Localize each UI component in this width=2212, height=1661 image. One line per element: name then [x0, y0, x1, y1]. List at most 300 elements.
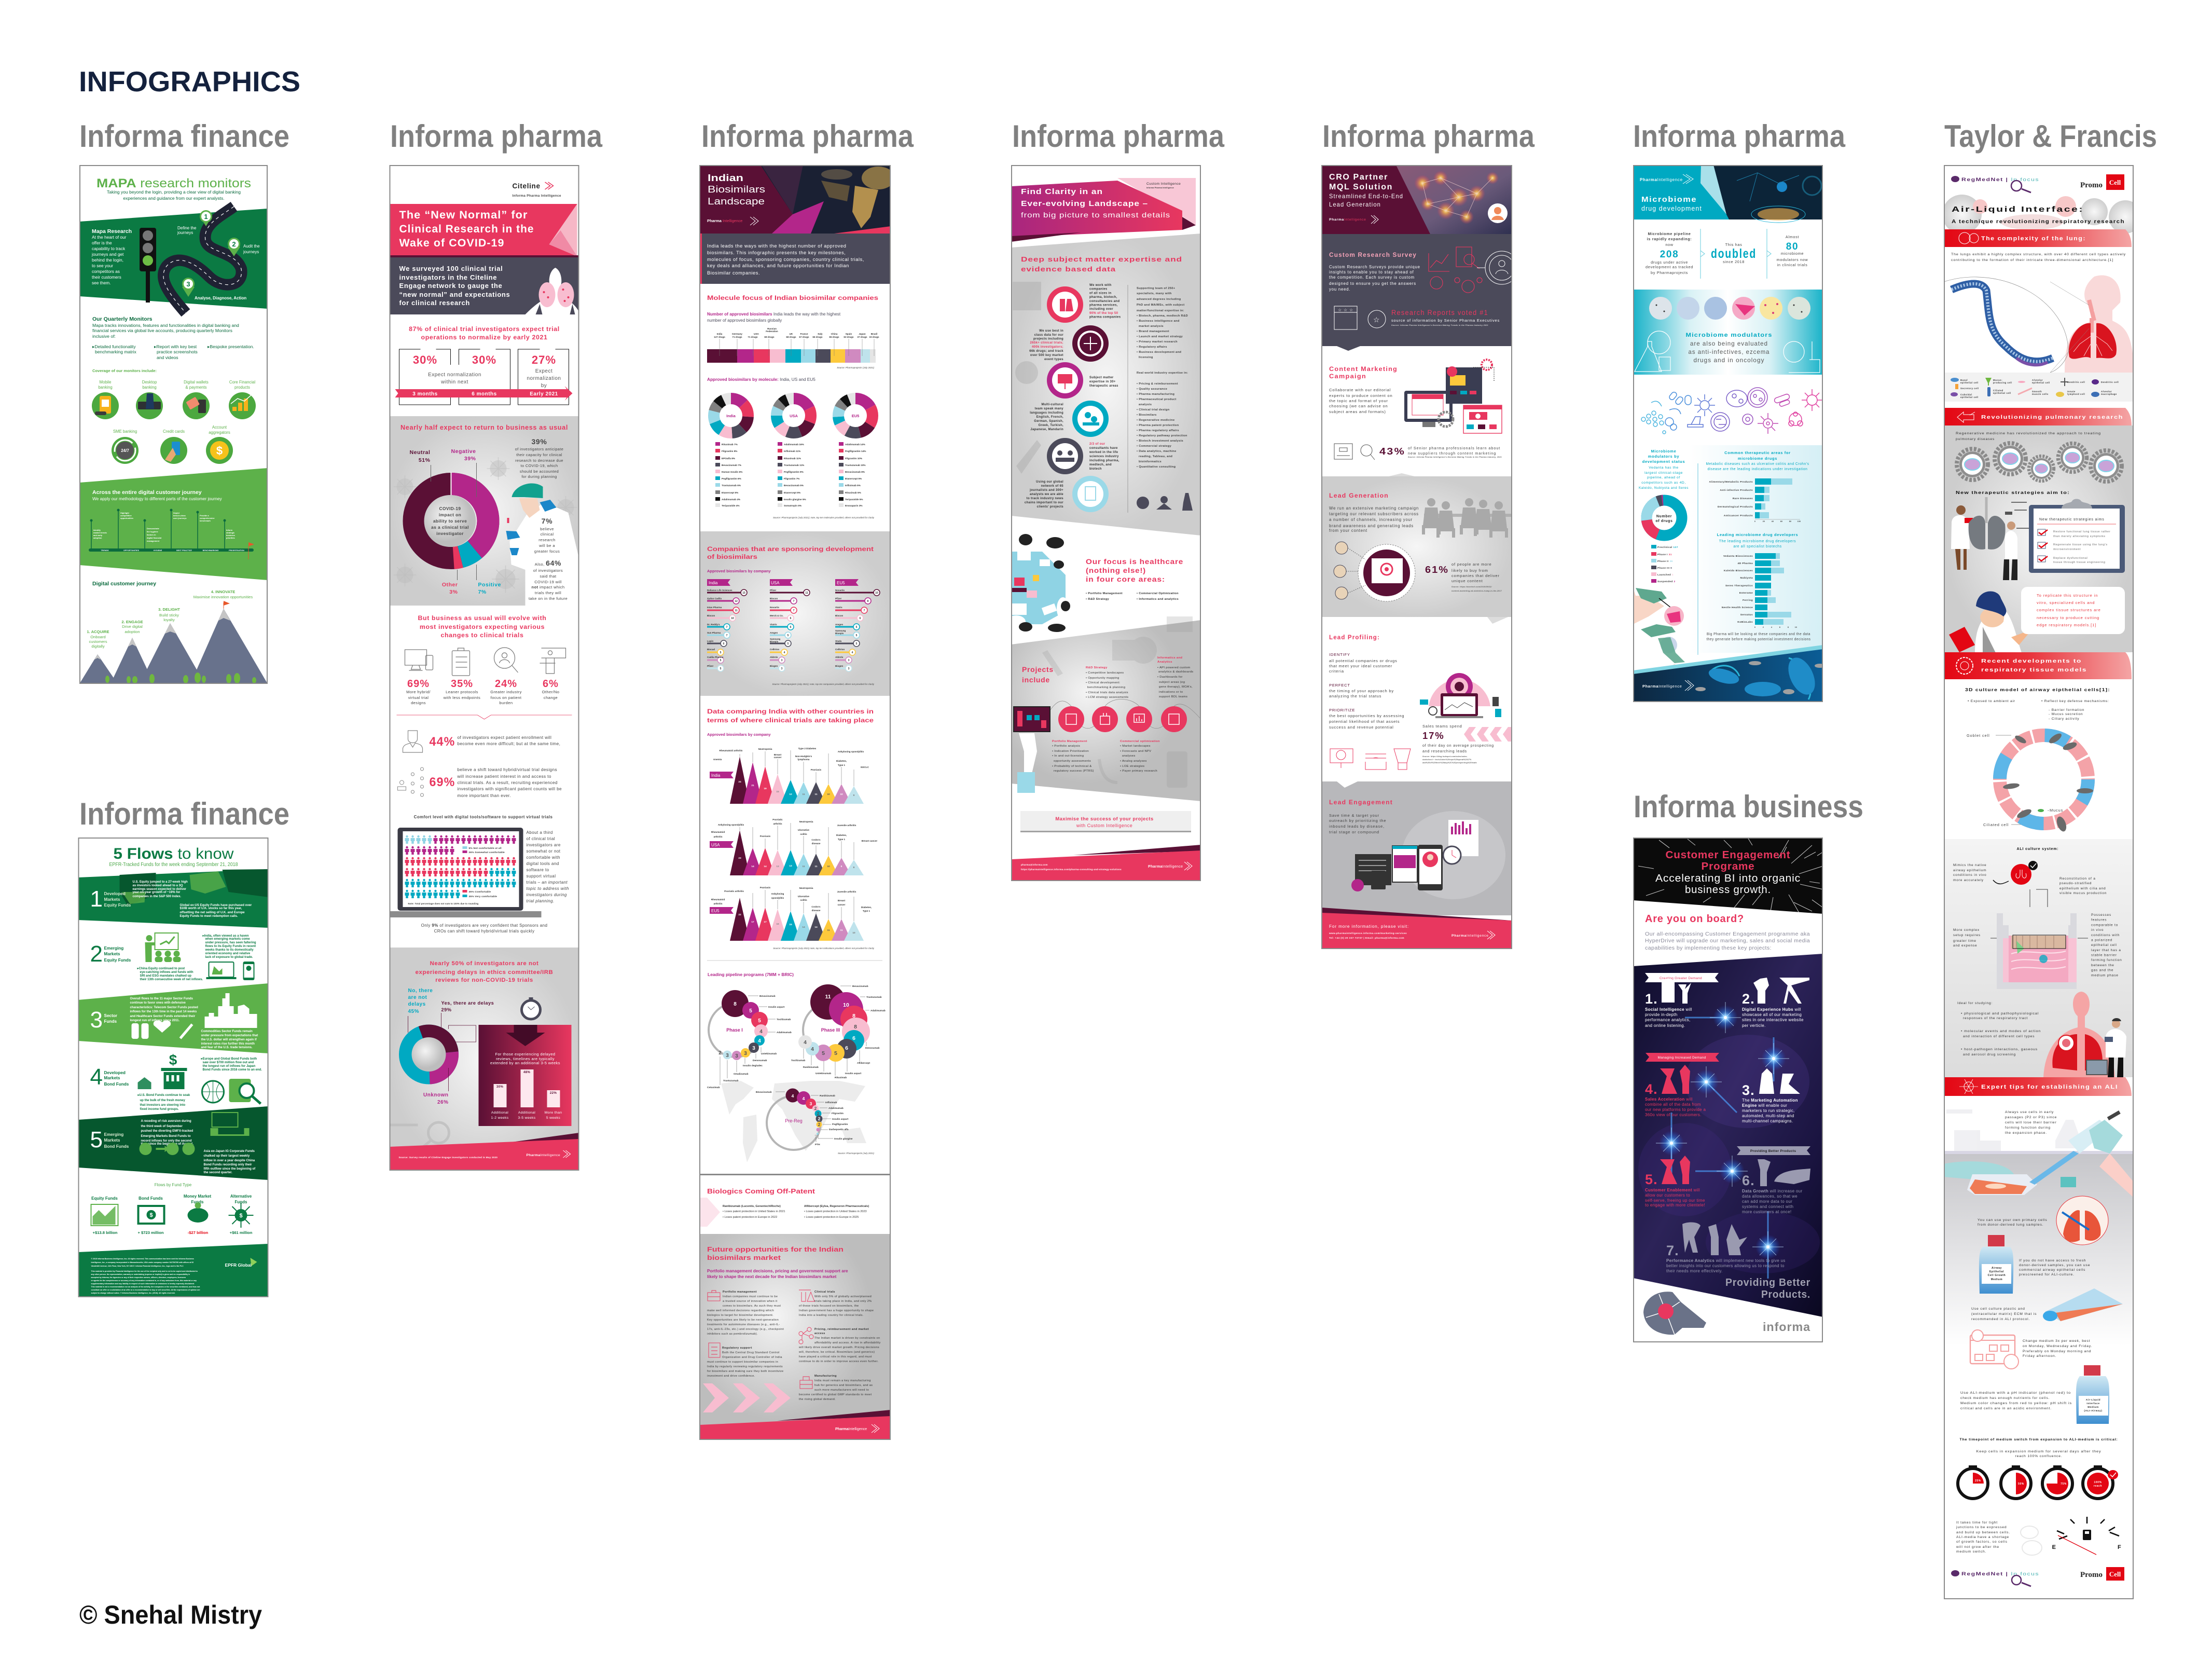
company bars: India: 5	[720, 659, 722, 662]
therapeutic areas chart: Alimentary/Metabolic Products	[1709, 481, 1753, 484]
deep subject matter section	[1011, 234, 1201, 536]
focus heading: Our focus is healthcare	[1086, 558, 1183, 566]
band 1 developed equity: U.S. Equity jumped to a 27-week high	[133, 881, 188, 884]
43 percent stat: of Senior pharma professionals learn about	[1408, 446, 1500, 450]
Mapa Research text: At the heart of our	[92, 235, 127, 240]
company bars: India: Cadila Pharma	[707, 656, 724, 658]
lead profiling section: PERFECT	[1329, 683, 1350, 688]
pipeline stat 208: is rapidly expanding:	[1647, 237, 1692, 241]
triangle chart: USA: 10	[827, 865, 830, 868]
ribbon: expert tips	[1943, 1077, 2132, 1096]
coverage icons	[92, 380, 256, 464]
country bar chart: 69 drugs	[764, 336, 775, 338]
content marketing section	[1329, 360, 1502, 433]
therapeutic areas heading: Common therapeutic areas for	[1724, 450, 1791, 455]
band 5 emerging bond: Asia ex-Japan IG Corporate Funds	[203, 1150, 255, 1153]
drug developers chart: 2	[1763, 626, 1764, 628]
projects section: • Competitive landscapes	[1086, 671, 1124, 675]
company bars: India: 10	[731, 617, 734, 620]
lead engagement section: inbound leads by disease,	[1329, 824, 1385, 829]
India intro band	[699, 234, 891, 284]
bubbles: Phase I: Denosumab	[753, 1059, 767, 1062]
tip: commercial cells: donor-derived samples, you can use	[2019, 1264, 2090, 1267]
bubbles: Phase I: 4	[758, 1038, 761, 1044]
flows by fund type heading: Flows by Fund Type	[155, 1183, 192, 1187]
molecule legends: Filgrastim 10%	[845, 457, 863, 460]
bubbles: Phase III: 4	[811, 1046, 814, 1052]
ethics delays section: 48%	[523, 1070, 530, 1074]
therapeutic areas chart: Anti-infective Products	[1720, 489, 1753, 492]
triangle chart: EU5: 17	[751, 921, 754, 924]
company bars: USA: 3	[781, 659, 783, 662]
fund type stats: -$27 billion	[188, 1230, 209, 1235]
expertise list text: advanced degrees including	[1137, 298, 1181, 301]
projects section: Portfolio Management	[1052, 740, 1087, 743]
projects section: Informatics and	[1157, 656, 1182, 660]
3D culture bullets: • Reflect key defense mechanisms:	[2041, 699, 2109, 703]
future opportunities section: India by regularly reviewing regulatory requirements	[707, 1365, 783, 1368]
lead profiling section: statistics#:~:text=Sales%20reps%20spend%2017%	[1422, 759, 1472, 761]
ethics delays section: No, there	[408, 988, 433, 994]
bubbles: Pre-Reg with world map: Pre-Reg	[785, 1118, 803, 1123]
triangle chart: India	[710, 747, 869, 804]
cell legend band: Mucus-	[1993, 379, 2002, 381]
footer disclaimer	[78, 1244, 269, 1297]
four changes icons and stats	[396, 648, 572, 719]
focus areas: • Informatics and analytics	[1137, 598, 1179, 601]
four changes icons and stats: 24%	[495, 678, 517, 690]
company bars: India: Biocon	[707, 614, 715, 617]
return to business section: COVID-19	[439, 506, 461, 511]
almost 80 stat: modulators now	[1777, 257, 1808, 262]
company bars: India: 7	[726, 634, 728, 637]
therapeutic areas chart	[1709, 478, 1801, 523]
cell legend band: Smooth	[2032, 390, 2042, 393]
bubbles: Pre-Reg with world map: 2	[814, 1106, 817, 1111]
expertise list text: analysis	[1139, 403, 1152, 406]
tip: phenol red	[1960, 1391, 2072, 1410]
return to business section: 7%	[542, 517, 552, 525]
3D culture bullets	[1968, 699, 2109, 721]
fund type stats: Bond Funds	[139, 1196, 163, 1201]
triangle chart: India: lymphoma	[798, 758, 810, 761]
survey intro band: “new normal” and expectations	[399, 291, 510, 298]
ethics delays section: 26%	[437, 1100, 448, 1105]
triangle chart: India: Type 2 Diabetes	[798, 747, 817, 750]
footer disclaimer: or agents for the completeness or accuracy of any information contained in, or of any omissions from, this material or any	[91, 1280, 197, 1282]
focus areas: • R&D Strategy	[1086, 598, 1110, 601]
footer disclaimer: This material is not a recommendation nor an analysis of the activity, the companies or the securities mentioned, and thus not	[91, 1286, 200, 1288]
four changes icons and stats: virtual trial	[408, 695, 428, 700]
company bars: USA: 6	[790, 626, 792, 629]
donut: India: India	[726, 414, 736, 418]
company bars: India: 5	[720, 651, 722, 654]
CRO footer	[1321, 908, 1512, 949]
triangle chart: USA: Psoriatic	[772, 818, 783, 821]
mountain chart: customers	[89, 639, 107, 644]
molecule legends: Adalimumab 14%	[845, 443, 866, 446]
ethics delays section: are not	[408, 995, 427, 1000]
clipboard: than merely alleviating symptoms	[2053, 535, 2105, 538]
step 3: Engine will enable our	[1742, 1103, 1787, 1108]
return to business section: will be a	[538, 543, 555, 548]
tight junction note: medium switch.	[1956, 1550, 1986, 1554]
panel: Indian Biosimilars Landscape	[699, 165, 891, 1440]
ALI culture section: greater time	[1953, 939, 1976, 943]
country bar chart: 37 drugs	[857, 336, 867, 338]
triangle chart: EU5: Neutropenia	[799, 887, 813, 889]
country bar chart: Italy	[818, 333, 823, 335]
return to business section: 7%	[478, 589, 487, 595]
big pharma note	[1707, 632, 1810, 641]
fund type stats: Money Market	[184, 1194, 212, 1199]
ethics delays section	[389, 948, 579, 1171]
drug developers chart: Kaleido Biosciences	[1724, 569, 1753, 572]
expertise chain text: We use best in	[1039, 329, 1063, 333]
Microbiome header: PharmaIntelligence	[1640, 177, 1683, 182]
44 percent row: become even more difficult; but at the same time,	[458, 742, 560, 746]
country bar chart	[707, 327, 879, 369]
cell legend band: Cuboidal	[1960, 393, 1972, 396]
informa wordmark: informa	[1763, 1320, 1810, 1334]
band 1 developed equity: year-on-year growth of ~19% for	[133, 891, 181, 894]
regenerative section: pulmonary diseases	[1956, 437, 1995, 441]
timers: 25%	[1975, 1479, 1981, 1482]
band 2 emerging equity: eye-catching inflows and funds with	[140, 971, 193, 974]
off-patent section: • Loses patent protection in Europe in 2025	[804, 1216, 859, 1219]
mountain chart: Maximise innovation opportunities	[193, 595, 253, 599]
lead profiling section: IDENTIFY	[1329, 652, 1350, 657]
return to business section: their capacity for clinical	[516, 452, 562, 457]
pipeline stat 208	[1646, 231, 1693, 275]
ribbon: better products	[1737, 1146, 1810, 1155]
green journey band: Highlight	[120, 512, 130, 514]
triangle chart: India: Diabetes,	[836, 760, 847, 762]
bubbles: Pre-Reg with world map: Infliximab	[825, 1101, 837, 1104]
comfort level side text: somewhat or not	[526, 849, 561, 854]
expertise chain text: 265k+ clinical trials;	[1030, 341, 1063, 345]
tip: phenol red: Use ALI-medium with a pH indicator (phenol red) to	[1960, 1391, 2071, 1395]
molecule legends: Etanercept 5%	[722, 491, 739, 494]
India intro band: key deals and alliances, and future opportunities for Indian	[707, 263, 849, 268]
company bars: EU5: 5	[856, 642, 858, 646]
cell legend band: Dendritic cell	[2067, 381, 2085, 383]
ALI culture section: • host-pathogen interactions, gaseous	[1961, 1048, 2038, 1051]
triangle chart: EU5: arthritis	[713, 902, 723, 905]
Citeline logo	[513, 182, 561, 198]
development status: Launched 1	[1657, 573, 1674, 576]
return to business section: Nearly half expect to return to business as usual	[400, 423, 568, 431]
tight junction note: and build up between cells.	[1956, 1531, 2010, 1534]
pipeline stat 208: now	[1665, 242, 1674, 247]
cell legend band: Alveolar	[2032, 379, 2043, 381]
Flows title: 5 Flows to know	[113, 845, 234, 862]
projects section: • In and out-licensing	[1052, 754, 1084, 758]
green journey band: HYGIENE	[154, 550, 162, 552]
green journey band: OPPORTUNITIES	[123, 550, 140, 552]
country bar chart: France	[800, 333, 808, 335]
drug developers chart: 4D Pharma	[1737, 562, 1753, 565]
return to business section: of investigators	[533, 568, 563, 573]
molecule legends: Rituximab 11%	[784, 457, 801, 460]
development status: Phase I 31	[1657, 553, 1672, 556]
India intro band: biosimilars. This infographic presents the key milestones,	[707, 250, 846, 255]
Mapa Research text: see them.	[92, 280, 110, 285]
tip: early passage cells	[2005, 1110, 2057, 1135]
cell legend band: Secretory cell	[1960, 387, 1979, 390]
green journey band: Identify	[93, 529, 101, 531]
CRO header: Streamlined End-to-End	[1329, 193, 1403, 200]
expertise list text: • Primary market research	[1137, 340, 1178, 344]
clinical trials heading	[707, 708, 874, 724]
molecule legends: Trastuzumab 11%	[784, 464, 805, 466]
ethics delays section: Nearly 50% of investigators are not	[430, 960, 538, 967]
are you on board: Our all-encompassing Customer Engagement programme aka	[1645, 931, 1810, 937]
bubbles: Phase III: Bevacizumab	[852, 985, 868, 988]
step 2: Digital Experience Hubs will	[1742, 1007, 1801, 1012]
triangle chart: USA: Psoriasis	[760, 835, 771, 838]
triangle chart: USA: 13	[789, 864, 792, 868]
RegMedNet PromoCell logos top	[1951, 174, 2124, 193]
69 percent row: 69%	[430, 775, 455, 789]
epithelial ring: Mucus	[2050, 808, 2063, 813]
expertise chain text: 90% of the top 50	[1089, 311, 1118, 315]
bubbles: Phase III: Rituximab	[835, 1076, 847, 1079]
return to business section: take on in the future	[529, 596, 568, 601]
triangle chart: EU5: Crohn's	[811, 905, 821, 908]
timers: reach	[2094, 1485, 2102, 1488]
company bars: EU5: Amgen	[835, 623, 844, 626]
company bars: EU5: 6	[860, 617, 861, 620]
step 5	[1645, 1156, 1705, 1207]
normalization boxes	[395, 348, 573, 405]
ethics delays section: 1-2 weeks	[491, 1116, 509, 1120]
providing better products: Providing Better	[1725, 1277, 1810, 1288]
ribbon: better products: Providing Better Products	[1750, 1149, 1796, 1153]
company bars: EU5: Biogen	[835, 665, 844, 667]
coverage icons: Mobile	[100, 380, 111, 385]
fund type stats	[91, 1194, 253, 1235]
band 4 developed bond: $	[169, 1052, 177, 1068]
modulators band: as anti-infectives, ezcema	[1688, 349, 1770, 355]
cell legend band: epithelial cell	[1960, 381, 1979, 384]
company bars: USA: Bioepis	[770, 640, 779, 643]
title banner: Wake of COVID-19	[399, 237, 504, 249]
molecule legends: EPOalfa 8%	[722, 457, 736, 460]
off-patent section: Biologics Coming Off-Patent	[707, 1187, 815, 1195]
bubbles: Phase I: Insulin degludec	[743, 1064, 763, 1067]
deep subject matter section: evidence based data	[1021, 265, 1116, 273]
triangle chart: EU5: 14	[802, 926, 805, 929]
triangle chart: USA: Rheumatoid	[711, 831, 725, 833]
triangle chart: EU5: Psoriatic arthritis	[724, 890, 744, 893]
CRO header: PharmaIntelligence	[1329, 218, 1366, 222]
tight junction note: will not grow after the	[1956, 1545, 1999, 1549]
triangle chart: USA: arthritis	[773, 822, 782, 825]
triangle chart: USA: 23	[738, 857, 741, 860]
lead generation section: brand awareness and generating leads	[1329, 524, 1414, 528]
future opportunities section: Manufacturing	[814, 1375, 837, 1378]
clipboard: Replace dysfunctional	[2053, 557, 2087, 560]
green journey band: digital financial	[147, 537, 161, 539]
regenerative section	[1944, 425, 2134, 653]
focus areas	[1086, 592, 1179, 601]
projects section: R&D Strategy	[1086, 666, 1108, 669]
bubbles: Phase III: 8	[852, 1013, 855, 1019]
43 percent stat: Source: Informa Pharma Intelligence's Decision Making Trends in the Pharma Industry, 2021	[1408, 456, 1502, 458]
green journey band: best-in-class	[173, 514, 186, 517]
triangle chart: EU5: 11	[840, 929, 843, 932]
bubbles: Phase I: 2	[718, 1050, 722, 1056]
India header: Biosimilars	[708, 184, 765, 195]
step 3: multi-channel campaigns.	[1742, 1119, 1793, 1123]
confidence note: CROs can shift toward hybrid/virtual trials quickly	[434, 929, 534, 934]
projects section: • LOE strategies	[1120, 765, 1144, 768]
green journey band: business	[226, 534, 235, 537]
comfort level side text: topic to address with	[526, 886, 569, 891]
lead generation section: 61%	[1425, 564, 1449, 575]
country bar chart: Source: Pharmaprojects (July 2021)	[837, 366, 874, 369]
molecule legends: Filgrastim 7%	[784, 477, 800, 480]
band 1 developed equity: Equity Funds to meet redemption calls.	[179, 915, 238, 918]
future opportunities section: Both the Central Drug Standard Control	[722, 1351, 780, 1354]
projects section	[1011, 616, 1201, 801]
footer disclaimer: EPFR Global	[225, 1262, 252, 1268]
comfort level side text: trials – an important	[526, 880, 568, 885]
3D culture bullets: - Barrier formation	[2049, 708, 2084, 712]
drug developers chart: Ferring	[1743, 599, 1753, 602]
triangle chart: EU5: colitis	[800, 899, 807, 901]
panel: 5 Flows to know	[78, 838, 269, 1297]
green journey band: Depict	[173, 512, 180, 514]
lead profiling section: 17%	[1422, 730, 1445, 741]
road step labels: journeys	[177, 230, 193, 235]
country bar chart: 67 drugs	[799, 336, 809, 338]
lung intro text: The lungs exhibit a highly complex structure, with over 40 different cell types actively	[1951, 253, 2126, 256]
normalization heading: operations to normalize by early 2021	[421, 334, 548, 341]
success banner: with Custom Intelligence	[1076, 823, 1132, 828]
expertise chain text: analysts we are able	[1030, 492, 1063, 496]
lead profiling section: Lead Profiling:	[1329, 634, 1380, 641]
tip: phenol red: check medium has enough nutrients for cells.	[1960, 1396, 2050, 1400]
evolve heading: But business as usual will evolve with	[418, 614, 547, 622]
future opportunities section: affordability and access. A rise in affordability	[814, 1341, 881, 1344]
therapeutic areas chart: Rare Diseases	[1733, 497, 1753, 500]
company bars: India: Pfizer	[707, 665, 714, 667]
heading: Informa pharma 2: Informa pharma	[701, 119, 914, 154]
bubbles: Phase III: 11	[825, 994, 831, 1000]
comfort level side text: investigators are	[526, 843, 561, 847]
future opportunities section: PharmaIntelligence	[835, 1427, 867, 1431]
bubbles: Phase III: Denosumab	[865, 1047, 880, 1050]
Citeline logo: Citeline	[513, 182, 541, 190]
Flows subtitle: EPFR-Tracked Funds for the week ending September 21, 2018	[109, 862, 238, 868]
triangle chart: USA: Neutropenia	[799, 820, 813, 823]
ribbon: complexity of the lung: The complexity of the lung:	[1981, 236, 2086, 242]
tip: early passage cells: forming function during	[2005, 1126, 2051, 1130]
mountain chart: Drive digital	[122, 624, 143, 629]
bubbles: Phase III: 5	[822, 1050, 825, 1056]
development status: Number	[1656, 515, 1672, 518]
company bars: India: 11	[735, 609, 738, 612]
ethics delays section: Yes, there are delays	[441, 1000, 494, 1006]
band 2 emerging equity: oriented economy and relative	[205, 952, 251, 955]
band 4 developed bond: Markets	[104, 1076, 120, 1080]
ethics delays section: 30%	[496, 1085, 503, 1089]
focus areas: • Portfolio Management	[1086, 592, 1123, 595]
projects section: Commercial optimization	[1120, 740, 1160, 743]
company bars: USA	[770, 589, 810, 671]
bubbles: Phase I: Omalizumab	[734, 1073, 749, 1076]
molecule legends	[715, 442, 875, 519]
step 5: self-serve, freeing up our time	[1645, 1198, 1705, 1203]
return to business section: 39%	[464, 456, 476, 462]
ribbon: revolutionizing	[1943, 408, 2132, 425]
triangle chart: USA: arthritis	[713, 835, 723, 838]
molecule legends: Adalimumab 16%	[784, 443, 805, 446]
band 4 developed bond: the longest run of inflows for Japan	[202, 1065, 256, 1068]
future opportunities section: Key opportunities are likely to be next-generation	[707, 1319, 779, 1322]
footer disclaimer: This material is provided by Financial Intelligence for the use of the recipient only and is not to be copied and distributed to	[91, 1270, 198, 1272]
expertise chain text: network of 65	[1041, 484, 1063, 488]
company bars: EU5: Pfizer	[835, 597, 842, 600]
company bars: EU5: 4	[852, 651, 853, 654]
company bars: India: 6	[723, 642, 725, 646]
molecule legends: Rituximab 5%	[845, 491, 862, 494]
country bar chart: Brazil	[871, 333, 877, 335]
country bar chart: Japan	[859, 333, 866, 335]
company bars: USA: 5	[787, 634, 789, 637]
band 5 emerging bond: Bond Funds recording only their	[203, 1163, 252, 1166]
step 7	[1666, 1223, 1786, 1273]
expertise chain text: 66k drugs; and track	[1029, 349, 1063, 353]
India intro band: molecules of focus, sponsoring companies, country clinical trials,	[707, 257, 864, 262]
country bar chart: 68 drugs	[786, 336, 796, 338]
content marketing section: Collaborate with our editorial	[1329, 388, 1391, 392]
doctors with lungs	[1951, 497, 2029, 580]
ribbon: creating demand: Creating Greater Demand	[1660, 977, 1702, 980]
pipeline stat 208: Microbiome pipeline	[1648, 231, 1691, 236]
molecule legends: Pegfilgrastim 9%	[784, 471, 804, 473]
survey intro band: Engage network to gauge the	[399, 282, 502, 290]
drug developers chart: Nubiyota	[1740, 576, 1753, 580]
ethics delays section: Additional	[518, 1111, 535, 1115]
company bars: India: Reliance Life Sciences	[707, 589, 732, 592]
laptop people chart	[389, 828, 542, 917]
band 2 emerging equity: lack of exposure to global trade.	[205, 956, 253, 959]
triangle chart: EU5: 17	[764, 921, 767, 924]
deep subject matter section: Deep subject matter expertise and	[1021, 255, 1182, 263]
fuel gauge: F	[2118, 1544, 2122, 1550]
projects section: • Opportunity mapping	[1086, 677, 1119, 680]
bubbles: Pre-Reg with world map: Ranibizumab	[820, 1094, 835, 1097]
lead generation section: of people are more	[1451, 562, 1491, 567]
RegMedNet PromoCell logos bottom	[1951, 1567, 2124, 1586]
molecule legends: Source: Pharmaprojects (July 2021); note, top ten molecules provided, others not provided for clarity	[773, 516, 875, 519]
expertise list text: • Regulatory pathway protection	[1137, 434, 1187, 437]
tip: plastic and flask: Use cell culture plastic and	[1971, 1307, 2025, 1311]
expertise chain text: journalists and 300+	[1029, 488, 1063, 492]
bubbles: Phase I: 4	[759, 1029, 763, 1035]
drug developers chart: 0	[1754, 626, 1755, 628]
medium switch heading: The timepoint of medium switch from expansion to ALI-medium is critical:	[1960, 1438, 2118, 1442]
band 5 emerging bond: fifth outflow since the beginning of	[203, 1168, 256, 1171]
69 percent row	[397, 767, 562, 798]
development status: pipeline, ahead of	[1647, 476, 1680, 479]
footer disclaimer: accepted by Informa, the Agencies or any of their respective owners, officers, directors, employees, licensees	[91, 1276, 186, 1279]
lead engagement section	[1321, 781, 1512, 915]
footer disclaimer: subject to change without notice. © Informa Business Intelligence, Inc. (2018). All rights reserved.	[91, 1292, 175, 1294]
